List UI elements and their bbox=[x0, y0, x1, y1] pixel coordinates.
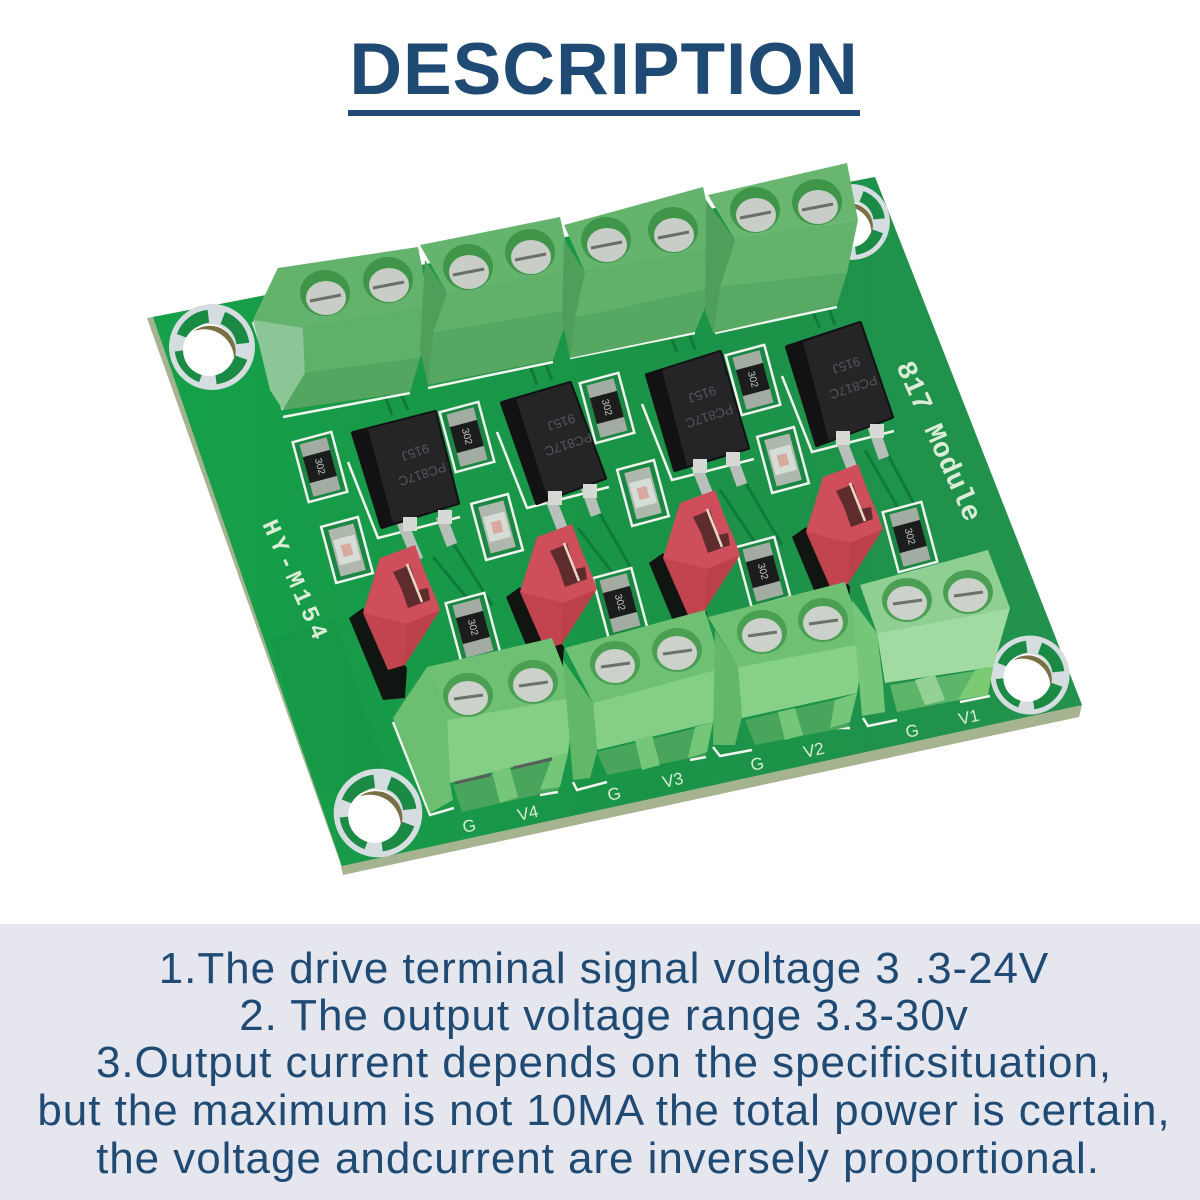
silkscreen labels: G bbox=[461, 815, 478, 837]
text block: specifications: 2. The output voltage range 3.3-30v bbox=[239, 991, 969, 1040]
text block: specifications: but the maximum is not 10MA the total power is certain, bbox=[37, 1086, 1171, 1135]
red jumpers bbox=[349, 464, 883, 700]
optocoupler chips: PC817C bbox=[543, 430, 594, 459]
optocoupler chips: 915J bbox=[546, 411, 577, 434]
silkscreen labels: G bbox=[904, 720, 921, 742]
text block: specifications: 3.Output current depends on the specificsituation, bbox=[96, 1038, 1112, 1087]
PCB traces and silk marks bbox=[253, 306, 990, 815]
title: DESCRIPTION: DESCRIPTION bbox=[349, 29, 859, 110]
text block: specifications bbox=[37, 944, 1171, 1183]
resistors and LEDs bbox=[293, 345, 937, 663]
icon: mounting holes bbox=[169, 184, 1070, 857]
optocoupler chips: PC817C bbox=[828, 373, 879, 402]
silkscreen labels: G bbox=[749, 753, 766, 775]
silkscreen labels: V4 bbox=[516, 802, 540, 825]
silkscreen labels bbox=[255, 357, 986, 837]
silkscreen labels: V1 bbox=[957, 706, 981, 729]
optocoupler chips: 915J bbox=[687, 383, 718, 406]
optocoupler chips: 915J bbox=[400, 441, 431, 464]
silkscreen labels: V3 bbox=[661, 769, 685, 792]
PCB module photo illustration bbox=[147, 163, 1082, 875]
silkscreen labels: HY-M154 bbox=[255, 516, 331, 644]
silkscreen labels: V2 bbox=[802, 739, 826, 762]
optocoupler chips: PC817C bbox=[684, 402, 735, 431]
board bbox=[147, 177, 1082, 875]
optocoupler chips bbox=[353, 323, 892, 560]
text block: specifications: 1.The drive terminal signal voltage 3 .3-24V bbox=[159, 944, 1049, 993]
silkscreen labels: G bbox=[606, 783, 623, 805]
silkscreen labels: 817 Module bbox=[888, 357, 986, 527]
text block: specifications: the voltage andcurrent are inversely proportional. bbox=[96, 1134, 1100, 1183]
panel: description text band bbox=[0, 924, 1200, 1200]
top terminal blocks bbox=[253, 163, 858, 410]
optocoupler chips: 915J bbox=[831, 354, 862, 377]
bottom terminal blocks bbox=[393, 550, 1010, 813]
optocoupler chips: PC817C bbox=[397, 460, 448, 489]
